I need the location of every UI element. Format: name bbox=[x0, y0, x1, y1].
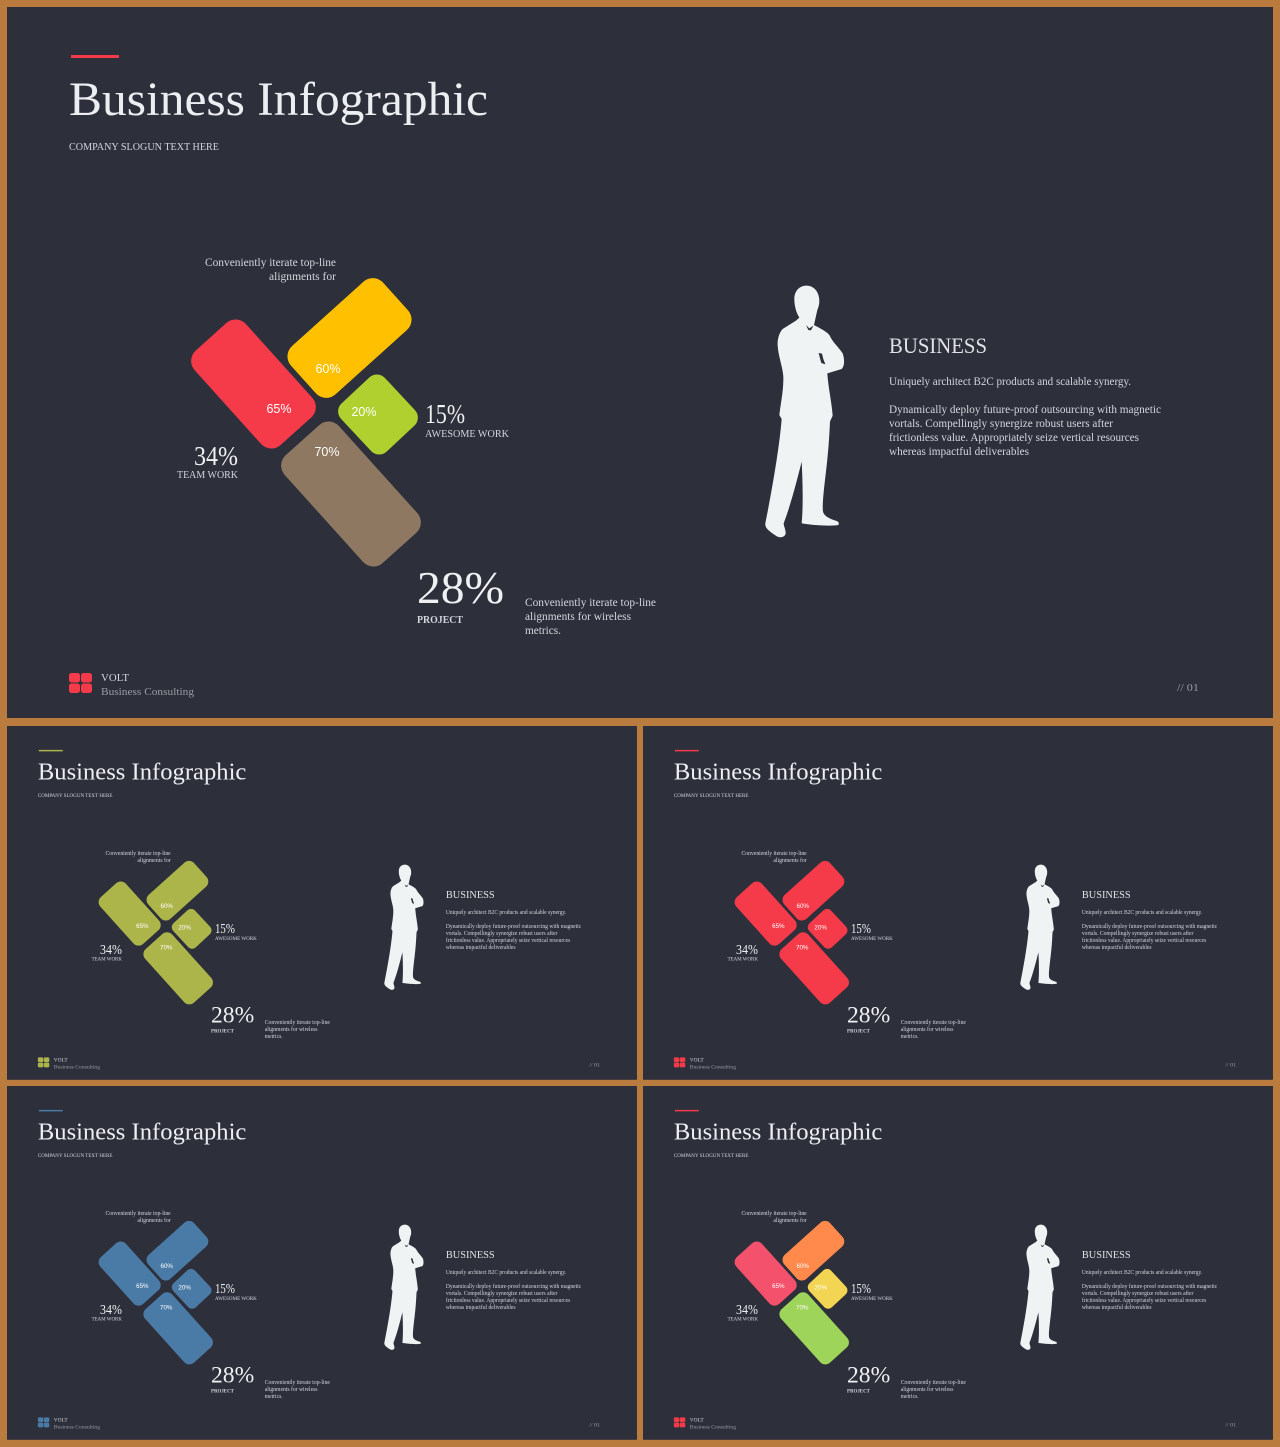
bar: 65% bbox=[732, 879, 800, 949]
body text: whereas impactful deliverables bbox=[1082, 1304, 1152, 1311]
icon: logo bbox=[38, 1417, 49, 1427]
footer brand: VOLT bbox=[54, 1417, 68, 1423]
project description: metrics. bbox=[265, 1394, 283, 1400]
bar: green 20% bbox=[334, 370, 422, 459]
footer brand: VOLT bbox=[101, 672, 129, 684]
body text: frictionless value. Appropriately seize vertical resources bbox=[1082, 1297, 1207, 1304]
body text: vortals. Compellingly synergize robust users after bbox=[1082, 930, 1193, 937]
body text bbox=[446, 1270, 582, 1311]
footer brand: VOLT bbox=[54, 1057, 68, 1063]
project description: alignments for wireless bbox=[901, 1386, 954, 1393]
page number: // 01 bbox=[1225, 1062, 1236, 1068]
title: Business Infographic bbox=[38, 1120, 246, 1146]
slogan: COMPANY SLOGUN TEXT HERE bbox=[38, 793, 113, 799]
chart: rotated bars bbox=[96, 1218, 216, 1367]
chart: rotated bars bbox=[732, 858, 852, 1007]
bar: 70%: 70% bbox=[160, 944, 173, 951]
stat: project: 28% bbox=[417, 562, 504, 613]
panel: multicolour slide bbox=[643, 1086, 1273, 1440]
bar: yellow 60%: 60% bbox=[315, 362, 341, 376]
bar: 65% bbox=[96, 1239, 164, 1309]
project description: Conveniently iterate top-line bbox=[265, 1020, 330, 1026]
bar: 20% bbox=[169, 1267, 214, 1311]
stat: team work: 34% bbox=[100, 942, 122, 957]
footer brand: Business Consulting bbox=[690, 1424, 736, 1430]
title: Business Infographic bbox=[69, 73, 488, 126]
footer brand bbox=[690, 1057, 736, 1070]
stat: awesome work: AWESOME WORK bbox=[851, 1296, 893, 1302]
heading: business: BUSINESS bbox=[1082, 1249, 1131, 1261]
body text: frictionless value. Appropriately seize vertical resources bbox=[446, 1297, 571, 1304]
project description bbox=[901, 1020, 966, 1040]
chart: rotated bars bbox=[185, 272, 427, 572]
project description: Conveniently iterate top-line bbox=[265, 1380, 330, 1386]
project description: Conveniently iterate top-line bbox=[901, 1020, 966, 1026]
bar: 20%: 20% bbox=[178, 1285, 191, 1292]
bar: 65% bbox=[96, 879, 164, 949]
top callout text bbox=[742, 1211, 807, 1224]
bar: yellow 20% bbox=[805, 1267, 850, 1311]
top callout text: alignments for bbox=[137, 1217, 171, 1224]
slogan: COMPANY SLOGUN TEXT HERE bbox=[674, 793, 749, 799]
icon: businessman silhouette bbox=[1020, 1225, 1060, 1350]
bar: brown 70% bbox=[275, 416, 427, 572]
body text: whereas impactful deliverables bbox=[889, 444, 1029, 458]
panel: olive slide bbox=[7, 726, 637, 1080]
body text: Dynamically deploy future-proof outsourcing with magnetic bbox=[1082, 923, 1218, 930]
title: Business Infographic bbox=[38, 760, 246, 786]
top callout text bbox=[205, 255, 336, 283]
project description: alignments for wireless bbox=[901, 1026, 954, 1033]
bar: 60% bbox=[144, 858, 211, 923]
footer brand bbox=[54, 1057, 100, 1070]
bar: green 20%: 20% bbox=[351, 405, 377, 419]
bar: orange 60%: 60% bbox=[797, 1263, 809, 1270]
body text: frictionless value. Appropriately seize vertical resources bbox=[1082, 937, 1207, 944]
body text bbox=[889, 374, 1161, 458]
accent line bbox=[39, 1110, 63, 1111]
bar: yellow 20%: 20% bbox=[814, 1285, 827, 1292]
footer brand: Business Consulting bbox=[54, 1064, 100, 1070]
heading: business: BUSINESS bbox=[446, 1249, 495, 1261]
stat: team work: 34% bbox=[736, 1302, 758, 1317]
bar: 60% bbox=[780, 858, 847, 923]
stat: awesome work: AWESOME WORK bbox=[215, 1296, 257, 1302]
footer brand: VOLT bbox=[690, 1057, 704, 1063]
page number: // 01 bbox=[589, 1062, 600, 1068]
top callout text: Conveniently iterate top-line bbox=[742, 851, 807, 857]
body text: Dynamically deploy future-proof outsourcing with magnetic bbox=[889, 402, 1161, 416]
body text: whereas impactful deliverables bbox=[1082, 944, 1152, 951]
project description: alignments for wireless bbox=[265, 1026, 318, 1033]
body text bbox=[1082, 910, 1218, 951]
stat: project: PROJECT bbox=[211, 1029, 234, 1035]
bar: brown 70%: 70% bbox=[314, 445, 340, 459]
stat: project: PROJECT bbox=[847, 1029, 870, 1035]
body text: Dynamically deploy future-proof outsourcing with magnetic bbox=[446, 923, 582, 930]
bar: orange 60% bbox=[780, 1218, 847, 1283]
stat: project: 28% bbox=[847, 1363, 890, 1388]
bar: 65%: 65% bbox=[136, 923, 149, 930]
project description bbox=[265, 1020, 330, 1040]
stat: awesome work bbox=[215, 921, 257, 942]
stat: project: PROJECT bbox=[417, 614, 464, 626]
stat: team work bbox=[728, 1302, 758, 1322]
project description: Conveniently iterate top-line bbox=[901, 1380, 966, 1386]
project description: metrics. bbox=[901, 1034, 919, 1040]
bar: 70% bbox=[141, 1289, 216, 1367]
heading: business: BUSINESS bbox=[1082, 889, 1131, 901]
body text: frictionless value. Appropriately seize vertical resources bbox=[889, 430, 1139, 444]
stat: project: 28% bbox=[211, 1003, 254, 1028]
top callout text: alignments for bbox=[773, 857, 807, 864]
accent line bbox=[675, 1110, 699, 1111]
icon: logo bbox=[674, 1057, 685, 1067]
top callout text: alignments for bbox=[773, 1217, 807, 1224]
body text: vortals. Compellingly synergize robust users after bbox=[446, 930, 557, 937]
body text: whereas impactful deliverables bbox=[446, 944, 516, 951]
body text: Dynamically deploy future-proof outsourcing with magnetic bbox=[1082, 1283, 1218, 1290]
project description: alignments for wireless bbox=[525, 609, 631, 623]
icon: businessman silhouette bbox=[1020, 865, 1060, 990]
bar: pink 65% bbox=[732, 1239, 800, 1309]
top callout text bbox=[742, 851, 807, 864]
stat: team work bbox=[92, 942, 122, 962]
page number: // 01 bbox=[589, 1422, 600, 1428]
icon: businessman silhouette bbox=[765, 286, 844, 537]
project description: metrics. bbox=[525, 623, 561, 637]
stat: awesome work bbox=[851, 1281, 893, 1302]
page number: // 01 bbox=[1177, 682, 1199, 694]
stat: team work: TEAM WORK bbox=[728, 1316, 758, 1322]
footer brand bbox=[54, 1417, 100, 1430]
footer brand: Business Consulting bbox=[54, 1424, 100, 1430]
title: Business Infographic bbox=[674, 1120, 882, 1146]
bar: red 65%: 65% bbox=[266, 402, 292, 416]
chart: rotated bars bbox=[732, 1218, 852, 1367]
body text: frictionless value. Appropriately seize vertical resources bbox=[446, 937, 571, 944]
chart: rotated bars bbox=[96, 858, 216, 1007]
stat: team work bbox=[177, 441, 238, 481]
stat: awesome work: 15% bbox=[851, 1281, 871, 1296]
bar: red 65% bbox=[185, 314, 322, 454]
accent line bbox=[39, 750, 63, 751]
bar: 60% bbox=[144, 1218, 211, 1283]
project description: metrics. bbox=[901, 1394, 919, 1400]
footer brand: VOLT bbox=[690, 1417, 704, 1423]
bar: 70%: 70% bbox=[796, 944, 809, 951]
accent line bbox=[71, 55, 119, 58]
bar: 20% bbox=[805, 907, 850, 951]
stat: team work bbox=[92, 1302, 122, 1322]
stat: project: PROJECT bbox=[847, 1389, 870, 1395]
stat: awesome work: 15% bbox=[425, 399, 465, 429]
panel: blue slide bbox=[7, 1086, 637, 1440]
slogan: COMPANY SLOGUN TEXT HERE bbox=[69, 141, 219, 153]
body text bbox=[446, 910, 582, 951]
stat: awesome work: 15% bbox=[215, 1281, 235, 1296]
stat: awesome work bbox=[851, 921, 893, 942]
body text: Uniquely architect B2C products and scalable synergy. bbox=[446, 910, 567, 916]
stat: team work: 34% bbox=[194, 441, 238, 471]
top callout text bbox=[106, 851, 171, 864]
stat: awesome work bbox=[425, 399, 509, 440]
project description bbox=[525, 595, 656, 637]
panel: main slide bbox=[7, 7, 1273, 718]
bar: 60%: 60% bbox=[161, 1263, 173, 1270]
panel: red slide bbox=[643, 726, 1273, 1080]
icon: logo bbox=[69, 673, 92, 693]
stat: team work: TEAM WORK bbox=[177, 469, 238, 481]
top callout text bbox=[106, 1211, 171, 1224]
project description: metrics. bbox=[265, 1034, 283, 1040]
bar: yellow 60% bbox=[282, 272, 417, 404]
icon: businessman silhouette bbox=[384, 1225, 424, 1350]
bar: 20%: 20% bbox=[814, 925, 827, 932]
bar: green 70%: 70% bbox=[796, 1304, 809, 1311]
project description: alignments for wireless bbox=[265, 1386, 318, 1393]
icon: logo bbox=[674, 1417, 685, 1427]
stat: team work: 34% bbox=[100, 1302, 122, 1317]
stat: awesome work: 15% bbox=[851, 921, 871, 936]
stat: awesome work: 15% bbox=[215, 921, 235, 936]
bar: 60%: 60% bbox=[797, 903, 809, 910]
body text: Dynamically deploy future-proof outsourcing with magnetic bbox=[446, 1283, 582, 1290]
project description bbox=[265, 1380, 330, 1400]
bar: pink 65%: 65% bbox=[772, 1283, 785, 1290]
body text: Uniquely architect B2C products and scalable synergy. bbox=[889, 374, 1131, 388]
bar: 70% bbox=[141, 929, 216, 1007]
bar: 20%: 20% bbox=[178, 925, 191, 932]
icon: logo bbox=[38, 1057, 49, 1067]
stat: project: 28% bbox=[211, 1363, 254, 1388]
stat: team work: TEAM WORK bbox=[92, 1316, 122, 1322]
project description: Conveniently iterate top-line bbox=[525, 595, 656, 609]
stat: project: PROJECT bbox=[211, 1389, 234, 1395]
slogan: COMPANY SLOGUN TEXT HERE bbox=[38, 1153, 113, 1159]
bar: 65%: 65% bbox=[772, 923, 785, 930]
stat: team work: 34% bbox=[736, 942, 758, 957]
footer brand bbox=[101, 672, 195, 698]
stat: team work bbox=[728, 942, 758, 962]
heading: business: BUSINESS bbox=[446, 889, 495, 901]
bar: green 70% bbox=[777, 1289, 852, 1367]
accent line bbox=[675, 750, 699, 751]
body text: vortals. Compellingly synergize robust users after bbox=[1082, 1290, 1193, 1297]
stat: project: 28% bbox=[847, 1003, 890, 1028]
stat: awesome work: AWESOME WORK bbox=[425, 428, 509, 440]
stat: team work: TEAM WORK bbox=[728, 956, 758, 962]
heading: business: BUSINESS bbox=[889, 333, 987, 358]
footer brand bbox=[690, 1417, 736, 1430]
body text: vortals. Compellingly synergize robust users after bbox=[446, 1290, 557, 1297]
bar: 20% bbox=[169, 907, 214, 951]
footer brand: Business Consulting bbox=[690, 1064, 736, 1070]
bar: 65%: 65% bbox=[136, 1283, 149, 1290]
slogan: COMPANY SLOGUN TEXT HERE bbox=[674, 1153, 749, 1159]
body text: Uniquely architect B2C products and scalable synergy. bbox=[1082, 1270, 1203, 1276]
body text bbox=[1082, 1270, 1218, 1311]
icon: businessman silhouette bbox=[384, 865, 424, 990]
bar: 70%: 70% bbox=[160, 1304, 173, 1311]
body text: vortals. Compellingly synergize robust users after bbox=[889, 416, 1113, 430]
top callout text: Conveniently iterate top-line bbox=[205, 255, 336, 269]
top callout text: Conveniently iterate top-line bbox=[106, 851, 171, 857]
top callout text: Conveniently iterate top-line bbox=[106, 1211, 171, 1217]
title: Business Infographic bbox=[674, 760, 882, 786]
project description bbox=[901, 1380, 966, 1400]
stat: team work: TEAM WORK bbox=[92, 956, 122, 962]
page number: // 01 bbox=[1225, 1422, 1236, 1428]
body text: whereas impactful deliverables bbox=[446, 1304, 516, 1311]
footer brand: Business Consulting bbox=[101, 686, 195, 698]
stat: awesome work: AWESOME WORK bbox=[215, 936, 257, 942]
top callout text: alignments for bbox=[137, 857, 171, 864]
top callout text: alignments for bbox=[269, 269, 336, 283]
stat: awesome work: AWESOME WORK bbox=[851, 936, 893, 942]
bar: 60%: 60% bbox=[161, 903, 173, 910]
stat: awesome work bbox=[215, 1281, 257, 1302]
body text: Uniquely architect B2C products and scalable synergy. bbox=[1082, 910, 1203, 916]
body text: Uniquely architect B2C products and scalable synergy. bbox=[446, 1270, 567, 1276]
bar: 70% bbox=[777, 929, 852, 1007]
top callout text: Conveniently iterate top-line bbox=[742, 1211, 807, 1217]
